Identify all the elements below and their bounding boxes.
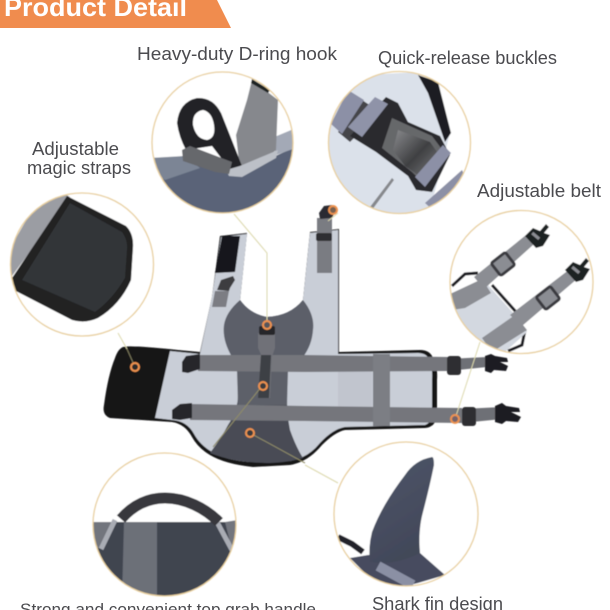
webbing roll (348, 97, 388, 137)
upper band (450, 279, 491, 310)
black binding (452, 273, 525, 351)
center mesh strip (258, 355, 271, 398)
center black loop (259, 326, 275, 335)
lower belt (510, 269, 577, 326)
upper belt (474, 235, 533, 289)
label: adjustable belt: Adjustable belt (477, 181, 601, 201)
label: quick-release buckles: Quick-release buckles (378, 48, 557, 68)
left neck buckle (217, 276, 235, 291)
lower strap (190, 404, 462, 423)
ring (334, 442, 478, 586)
banner: product detail (0, 0, 231, 28)
leader lines (118, 213, 480, 483)
callout: D-ring hook (150, 70, 296, 216)
left neck black patch (215, 236, 240, 273)
left grey patch (91, 522, 112, 548)
right neck strap (317, 218, 332, 273)
velcro inner (22, 203, 127, 312)
label: heavy-duty D-ring hook: Heavy-duty D-ring hook (137, 44, 338, 64)
lower band (482, 316, 528, 349)
callout: adjustable belt (448, 208, 596, 356)
ring right leg front (220, 114, 242, 166)
left neck strap (212, 291, 229, 307)
right buckles (485, 354, 521, 424)
grey strap (378, 566, 413, 585)
seam line (370, 178, 394, 210)
black patch (10, 196, 133, 322)
side loops (101, 520, 232, 550)
ring (10, 193, 154, 336)
light corner (274, 130, 293, 156)
light fold (226, 150, 278, 177)
webbing strap (236, 80, 278, 172)
strap end (251, 79, 270, 93)
vest surface (162, 148, 293, 214)
marker dots (131, 206, 459, 437)
central dark panel (210, 357, 303, 463)
black strap (338, 537, 363, 552)
upper dark panel (224, 300, 313, 357)
handle arc (121, 498, 219, 522)
surface highlight (150, 156, 200, 180)
right neck slider (316, 233, 332, 241)
right neck top buckle (319, 205, 335, 219)
fin body base (350, 553, 445, 588)
left buckles (172, 354, 200, 420)
sliders (491, 252, 560, 310)
callout: quick-release buckle (326, 69, 474, 217)
buckle body (350, 97, 450, 192)
right grey patch (225, 520, 238, 550)
lower panel mid section (237, 370, 288, 405)
center strap and mesh (258, 333, 275, 398)
callout: magic straps (9, 192, 155, 338)
left webbing (331, 90, 364, 134)
vertical strap (373, 354, 390, 426)
callout: shark fin (332, 440, 480, 588)
fin (369, 457, 434, 563)
light fabric (326, 72, 450, 217)
dark panel (97, 521, 231, 596)
buckle center (393, 130, 437, 175)
vest outline and black flap (104, 229, 437, 467)
buckle highlights (531, 232, 580, 274)
ring (328, 72, 470, 214)
mesh band (122, 522, 157, 598)
right webbing roll (415, 145, 451, 187)
back panel shading (338, 370, 372, 407)
lower loop (182, 146, 232, 174)
buckles (525, 224, 590, 282)
ring (152, 72, 293, 213)
ring (93, 453, 236, 596)
lower right strap tail (462, 407, 502, 423)
vest light body (155, 230, 432, 462)
light panel (450, 285, 527, 352)
callout: grab handle (91, 451, 239, 599)
sliders (447, 356, 476, 426)
life vest illustration (104, 205, 521, 467)
black strap (418, 75, 451, 142)
ring (450, 210, 593, 354)
buckle shell (382, 118, 441, 176)
label: adjustable magic straps: magic straps (27, 158, 131, 178)
label: adjustable magic straps: Adjustable (32, 139, 119, 159)
grey fabric wedge (9, 192, 70, 280)
bottom webbing (424, 170, 464, 207)
buckle shadow (338, 100, 369, 142)
D ring (177, 98, 242, 171)
label: adjustable magic straps (27, 139, 131, 178)
upper right strap tail (448, 357, 487, 371)
upper strap (198, 355, 448, 372)
